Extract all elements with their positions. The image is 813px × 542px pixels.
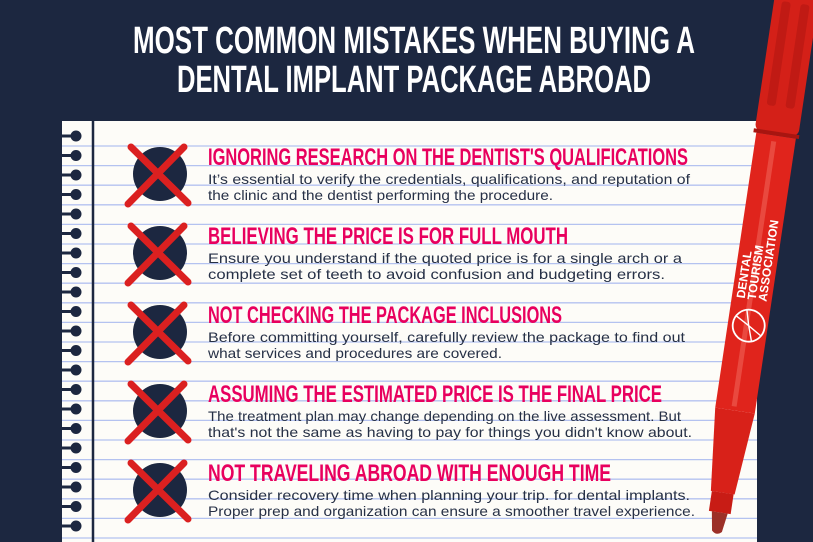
- item 2: BELIEVING THE PRICE IS FOR FULL MOUTH: [208, 223, 568, 250]
- icon: x mark: [128, 226, 188, 283]
- item 4: [128, 381, 692, 441]
- icon: x mark: [128, 305, 188, 362]
- item 1: It’s essential to verify the credentials, qualifications, and reputation of: [208, 171, 690, 187]
- item 4: The treatment plan may change depending on the live assessment. But: [208, 408, 681, 424]
- item 3: what services and procedures are covered.: [207, 345, 502, 361]
- item 1: the clinic and the dentist performing the procedure.: [208, 187, 553, 203]
- item 2: Ensure you understand if the quoted price is for a single arch or a: [208, 250, 682, 266]
- logo: dental tourism association: ASSOCIATION: [756, 219, 782, 302]
- item 3: NOT CHECKING THE PACKAGE INCLUSIONS: [208, 302, 562, 329]
- item 5: Proper prep and organization can ensure a smoother travel experience.: [208, 503, 695, 519]
- logo: dental tourism association: [728, 216, 782, 344]
- item 2: complete set of teeth to avoid confusion and budgeting errors.: [208, 266, 665, 282]
- icon: x mark: [128, 147, 188, 204]
- item 2: [128, 223, 682, 283]
- item 3: [128, 302, 685, 362]
- title: [133, 20, 695, 101]
- panel: notebook paper: [60, 121, 757, 542]
- item 5: [128, 460, 695, 520]
- logo: dental tourism association: DENTAL: [734, 250, 755, 299]
- item 1: [128, 144, 690, 204]
- logo: dental tourism association: TOURISM: [745, 244, 767, 301]
- item 5: Consider recovery time when planning your trip. for dental implants.: [208, 487, 690, 503]
- icon: x mark: [128, 463, 188, 520]
- marker pen: [694, 0, 813, 537]
- icon: x mark: [128, 384, 188, 441]
- item 4: that's not the same as having to pay for things you didn't know about.: [208, 424, 692, 440]
- item 5: NOT TRAVELING ABROAD WITH ENOUGH TIME: [208, 460, 611, 487]
- item 3: Before committing yourself, carefully review the package to find out: [208, 329, 685, 345]
